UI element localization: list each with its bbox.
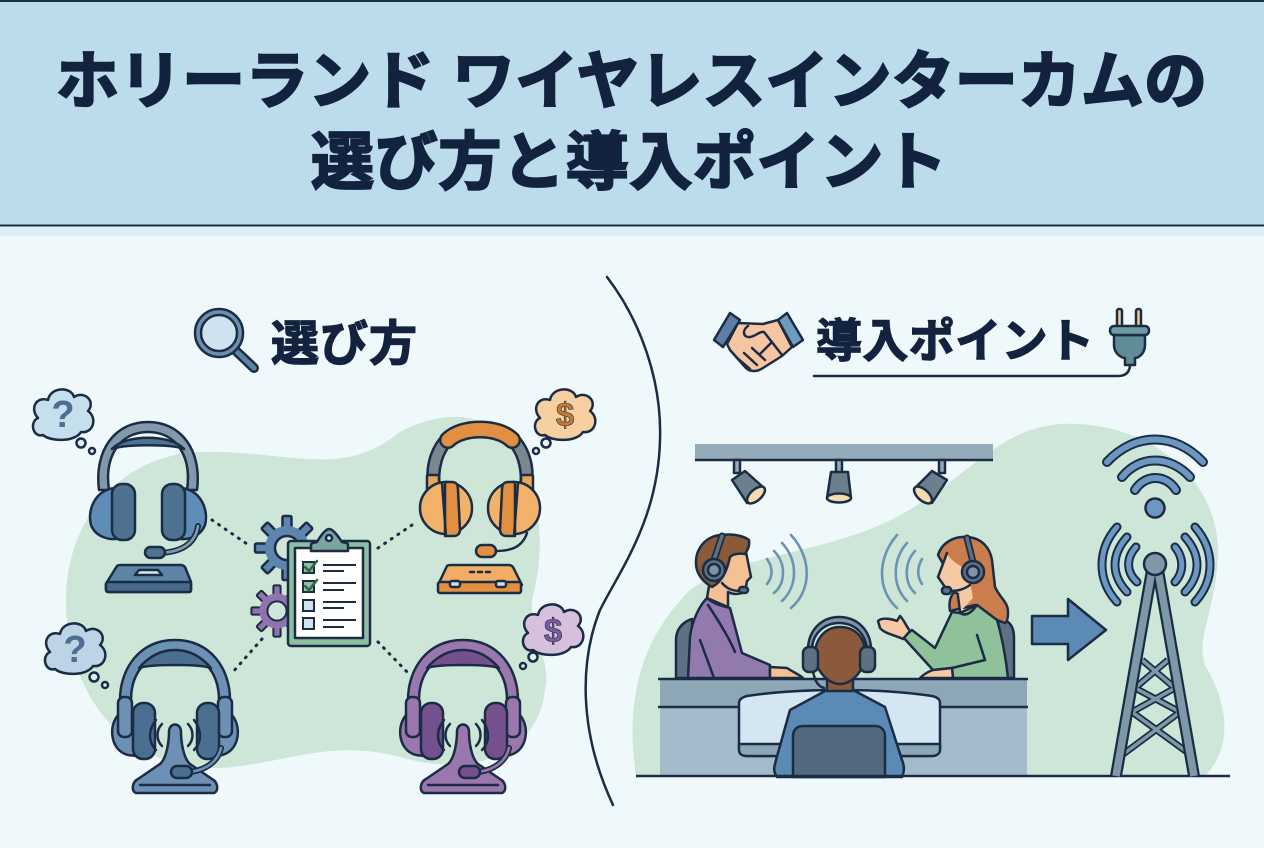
sound waves: operator left bbox=[767, 535, 807, 608]
heading: 導入ポイント bbox=[714, 309, 1149, 376]
headset: orange with base bbox=[420, 430, 540, 593]
icon: purple gear bbox=[251, 585, 303, 637]
dotted connectors bbox=[212, 520, 415, 675]
sound waves: operator right bbox=[882, 535, 922, 608]
divider curve bbox=[586, 277, 660, 805]
spotlights bbox=[732, 460, 947, 506]
underline cable bbox=[814, 364, 1130, 376]
headset: blue with flat base bbox=[90, 422, 206, 592]
radio tower bbox=[1102, 527, 1210, 776]
headset: blue on stand bbox=[112, 640, 238, 793]
person: center operator from behind bbox=[774, 617, 904, 777]
icon: magnifying glass bbox=[195, 309, 254, 368]
panel: implementation background blob bbox=[633, 424, 1224, 776]
thought bubble: question 2: ? bbox=[63, 629, 87, 671]
icon: handshake bbox=[714, 313, 803, 371]
thought bubble: price purple bbox=[520, 604, 583, 669]
thought bubble: question 1: ? bbox=[51, 394, 75, 436]
heading text: 選び方 bbox=[271, 318, 417, 371]
headset: purple on stand bbox=[400, 640, 526, 793]
heading: 選び方 bbox=[195, 309, 417, 371]
title bbox=[56, 47, 1207, 198]
icon: plug bbox=[1110, 309, 1149, 365]
title: 選び方と導入ポイント bbox=[311, 128, 947, 198]
arrow bbox=[1032, 599, 1106, 660]
thought bubble: price orange: $ bbox=[556, 396, 574, 433]
ceiling light rail bbox=[695, 444, 993, 506]
thought bubble: question 1 bbox=[33, 389, 95, 454]
title: ホリーランド ワイヤレスインターカムの bbox=[56, 47, 1207, 117]
person: man in purple bbox=[676, 534, 803, 678]
monitor bbox=[739, 690, 940, 756]
icon: checklist clipboard bbox=[288, 529, 370, 646]
panel: selection background blob bbox=[66, 417, 546, 768]
thought bubble: price orange bbox=[533, 389, 595, 454]
icon: wireless signal bbox=[1107, 440, 1203, 518]
thought bubble: price purple: $ bbox=[544, 612, 562, 649]
floor line bbox=[636, 775, 1230, 777]
operator desk bbox=[658, 679, 1028, 776]
heading text: 導入ポイント bbox=[816, 315, 1094, 367]
antenna waves bbox=[1102, 527, 1210, 602]
title banner bbox=[0, 0, 1264, 236]
person: woman in green bbox=[878, 537, 1014, 678]
icon: blue gear bbox=[255, 516, 319, 580]
thought bubble: question 2 bbox=[45, 623, 108, 688]
lattice bbox=[1116, 570, 1194, 776]
